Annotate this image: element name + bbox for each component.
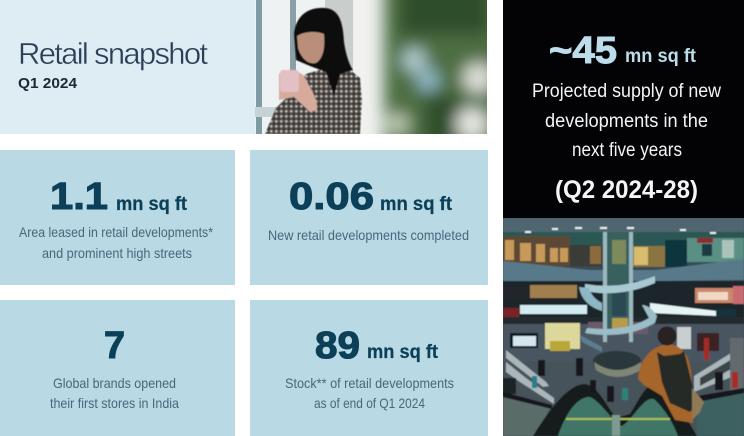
photo: shopping mall atrium [503, 218, 744, 436]
ceiling is part of the photo [503, 218, 744, 232]
description: global brands: their first stores in India [50, 395, 179, 411]
stat: 89 mn sq ft: mn sq ft [367, 342, 439, 363]
stat: 7: 7 [104, 325, 125, 367]
description: projected supply: next five years [572, 140, 682, 161]
description: stock [285, 375, 454, 411]
stat: ~45 mn sq ft [549, 30, 697, 72]
card: stock [250, 300, 488, 436]
stat: 0.06 mn sq ft: mn sq ft [380, 194, 453, 215]
photo: woman holding a cup by a window [255, 0, 487, 134]
description: area leased: and prominent high streets [42, 245, 192, 261]
description: projected supply [532, 81, 721, 161]
stat: 1.1 mn sq ft: mn sq ft [116, 194, 188, 215]
description: global brands: Global brands opened [53, 375, 176, 391]
stat: ~45 mn sq ft: ~45 [549, 30, 617, 72]
stat: 89 mn sq ft: 89 [315, 325, 360, 367]
description: projected supply: developments in the [545, 111, 708, 132]
card: global brands [0, 300, 235, 436]
subtitle: Q1 2024 [18, 75, 78, 92]
title: Retail snapshot [18, 36, 208, 71]
panel: header [0, 0, 255, 134]
card: new developments [250, 150, 488, 285]
stat: 0.06 mn sq ft [289, 176, 453, 218]
stat: 1.1 mn sq ft: 1.1 [50, 176, 108, 218]
period: Q2 2024-28: (Q2 2024-28) [555, 176, 698, 204]
stat: 0.06 mn sq ft: 0.06 [289, 176, 374, 218]
stat: ~45 mn sq ft: mn sq ft [625, 46, 697, 67]
description: new developments: New retail developments completed [268, 227, 469, 243]
card: area leased [0, 150, 235, 285]
description: area leased [19, 224, 213, 261]
panel: projected supply [503, 0, 744, 218]
stat: 1.1 mn sq ft [50, 176, 188, 218]
stat: 89 mn sq ft [315, 325, 439, 367]
description: global brands [50, 375, 179, 411]
description: area leased: Area leased in retail developments* [19, 224, 213, 240]
description: stock: Stock** of retail developments [285, 375, 454, 391]
description: projected supply: Projected supply of new [532, 81, 721, 102]
description: stock: as of end of Q1 2024 [314, 395, 425, 411]
